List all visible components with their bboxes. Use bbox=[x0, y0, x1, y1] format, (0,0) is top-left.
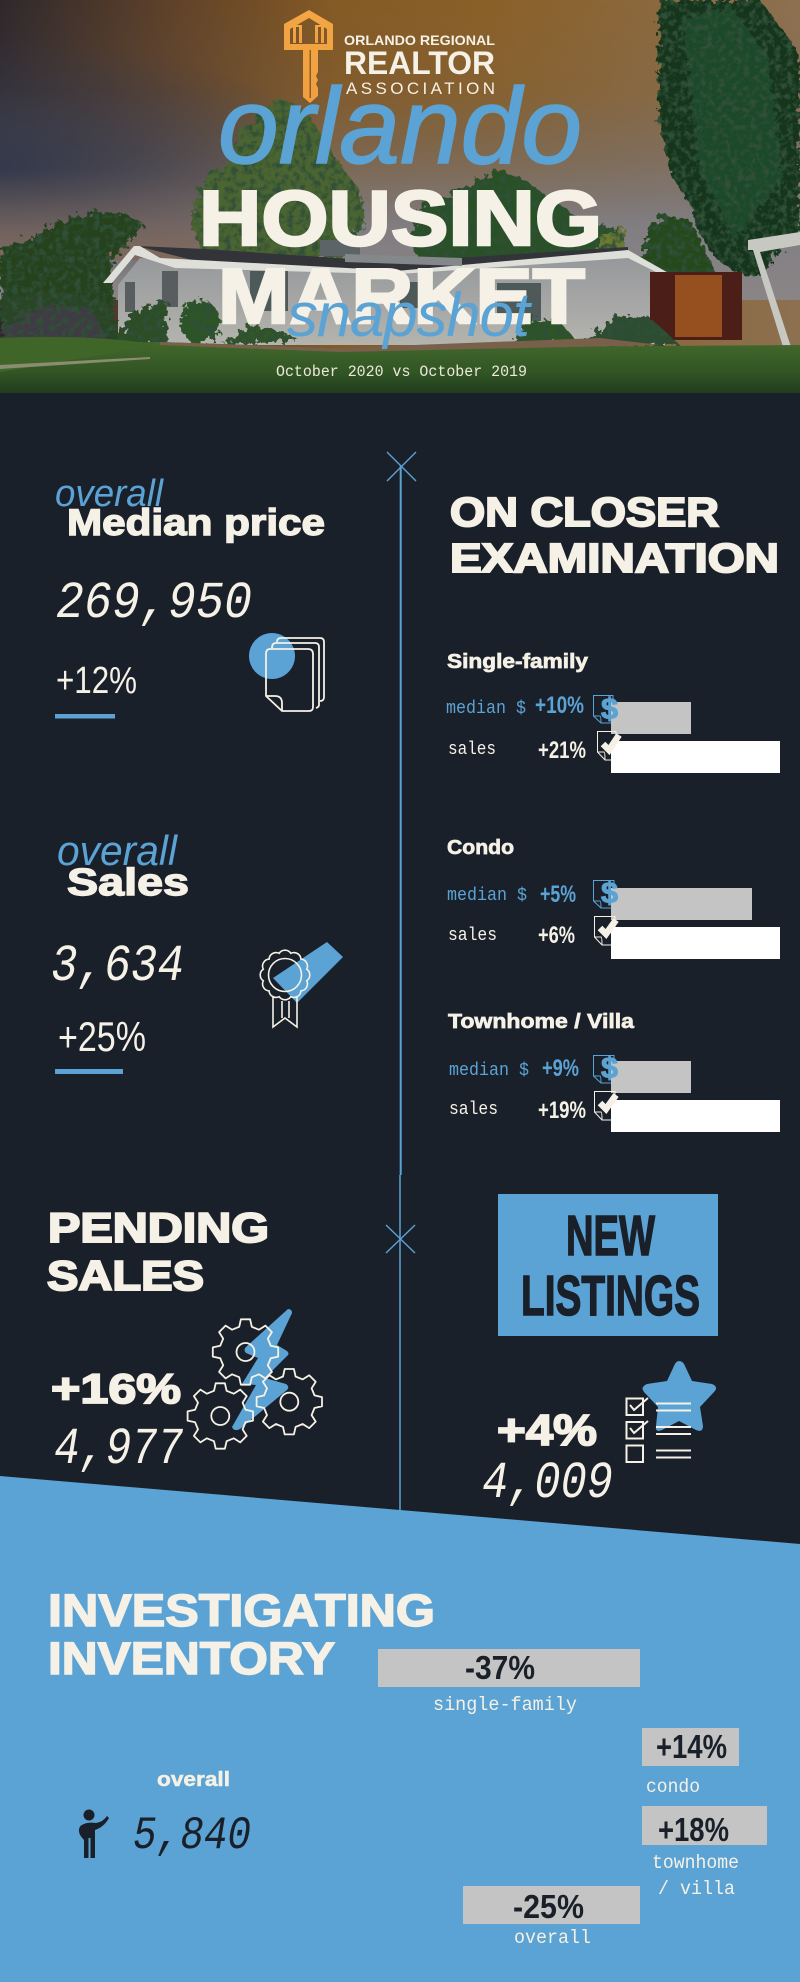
icon: key house bbox=[284, 10, 333, 103]
subtitle: date comparison: October 2020 vs October 2019 bbox=[276, 363, 527, 381]
change: +25%: +25% bbox=[58, 1013, 146, 1060]
heading box: new listings: NEW bbox=[566, 1204, 655, 1268]
title: market: MARKET bbox=[218, 252, 585, 340]
panel: overall median price bbox=[55, 473, 325, 718]
panel: new listings bbox=[482, 1194, 718, 1513]
change: +4%: +4% bbox=[497, 1406, 597, 1455]
bar: townhome / villa +18%: townhome bbox=[652, 1852, 739, 1874]
row: median price: +10% bbox=[535, 692, 584, 719]
panel: condo bbox=[447, 837, 780, 959]
bar: townhome / villa +18%: +18% bbox=[658, 1811, 729, 1848]
value: 269,950: 269,950 bbox=[56, 574, 252, 633]
panel: investigating inventory background bbox=[0, 1476, 800, 1982]
bar: condo +14% bbox=[642, 1728, 739, 1798]
row: sales: sales bbox=[448, 926, 497, 946]
row: median price: +9% bbox=[542, 1055, 579, 1082]
label: overall inventory: overall bbox=[157, 1769, 230, 1791]
subheading: townhome / villa: Townhome / Villa bbox=[448, 1011, 635, 1033]
row: median price bbox=[447, 877, 752, 920]
heading: median price: Median price bbox=[67, 502, 325, 543]
bar: single-family -37% bbox=[378, 1649, 640, 1716]
heading: pending sales: PENDING bbox=[48, 1204, 269, 1251]
bar: overall -25% bbox=[463, 1886, 640, 1949]
row: sales: +19% bbox=[538, 1097, 586, 1124]
row: sales: +6% bbox=[538, 922, 575, 949]
bar: overall -25%: -25% bbox=[513, 1888, 584, 1925]
value: 4,009: 4,009 bbox=[482, 1454, 613, 1513]
row: median price: median $ bbox=[446, 699, 526, 719]
title: housing: HOUSING bbox=[199, 174, 602, 262]
change: +16%: +16% bbox=[51, 1365, 181, 1412]
row: sales bbox=[448, 916, 780, 959]
value: 5,840: 5,840 bbox=[133, 1810, 251, 1862]
header photo: house at dusk bbox=[0, 0, 800, 393]
label: overall: overall bbox=[57, 827, 179, 874]
row: sales bbox=[449, 1092, 780, 1132]
value: 3,634: 3,634 bbox=[51, 937, 184, 996]
heading: on closer examination bbox=[450, 489, 779, 581]
logo text: ORLANDO REGIONAL bbox=[344, 32, 495, 48]
icon: gears and lightning bbox=[188, 1309, 322, 1449]
row: median price: median $ bbox=[449, 1061, 529, 1081]
subheading: condo: Condo bbox=[447, 837, 514, 859]
subheading: single-family: Single-family bbox=[447, 651, 589, 673]
bar: overall -25%: overall bbox=[514, 1927, 591, 1949]
icon: stacked documents bbox=[249, 633, 324, 711]
bar: townhome / villa +18%: / villa bbox=[658, 1878, 735, 1900]
row: sales: +21% bbox=[538, 737, 586, 764]
row: median price: $ bbox=[601, 877, 618, 910]
underline accent bbox=[55, 1069, 123, 1074]
underline accent bbox=[55, 714, 115, 718]
heading: investigating inventory: INVENTORY bbox=[48, 1633, 335, 1684]
panel: pending sales: SALES bbox=[47, 1252, 204, 1299]
title: orlando: orlando bbox=[218, 65, 582, 186]
house bbox=[118, 252, 665, 345]
panel: single-family bbox=[446, 651, 780, 773]
logo: Orlando Regional Realtor Association bbox=[284, 10, 495, 103]
heading: investigating inventory bbox=[48, 1585, 435, 1684]
panel: overall sales bbox=[51, 827, 343, 1074]
label: overall: overall bbox=[55, 473, 164, 515]
panel: townhome / villa bbox=[448, 1011, 780, 1132]
title: snapshot: snapshot bbox=[287, 281, 533, 350]
bar: condo +14%: condo bbox=[646, 1776, 700, 1798]
heading: sales: Sales bbox=[67, 862, 189, 904]
row: median price: $ bbox=[601, 1052, 618, 1085]
bar: single-family -37%: single-family bbox=[433, 1694, 577, 1716]
row: sales: sales bbox=[449, 1100, 498, 1120]
logo association line: ASSOCIATION bbox=[346, 79, 495, 98]
central divider with X marks bbox=[386, 452, 416, 1510]
row: median price bbox=[446, 692, 691, 734]
heading box: new listings: LISTINGS bbox=[521, 1264, 700, 1328]
heading: on closer examination: ON CLOSER bbox=[450, 489, 719, 535]
icon: person pointing bbox=[79, 1810, 109, 1858]
icon: award ribbon bbox=[260, 942, 343, 1027]
heading box: new listings bbox=[498, 1194, 718, 1336]
row: median price: $ bbox=[601, 693, 618, 726]
row: median price bbox=[449, 1052, 691, 1093]
bar: single-family -37%: -37% bbox=[465, 1649, 535, 1686]
value: 4,977: 4,977 bbox=[54, 1420, 184, 1479]
bar: townhome / villa +18% bbox=[642, 1806, 767, 1900]
bar: condo +14%: +14% bbox=[656, 1728, 727, 1765]
row: median price: median $ bbox=[447, 886, 527, 906]
row: sales: sales bbox=[448, 740, 496, 760]
heading: investigating inventory: INVESTIGATING bbox=[48, 1585, 435, 1636]
row: sales bbox=[448, 732, 780, 773]
heading: on closer examination: EXAMINATION bbox=[450, 535, 779, 581]
row: median price: +5% bbox=[540, 881, 576, 908]
logo wordmark: REALTOR bbox=[344, 45, 495, 81]
change: +12%: +12% bbox=[56, 660, 137, 702]
panel: pending sales bbox=[47, 1204, 322, 1479]
icon: star and checklist bbox=[626, 1361, 716, 1462]
